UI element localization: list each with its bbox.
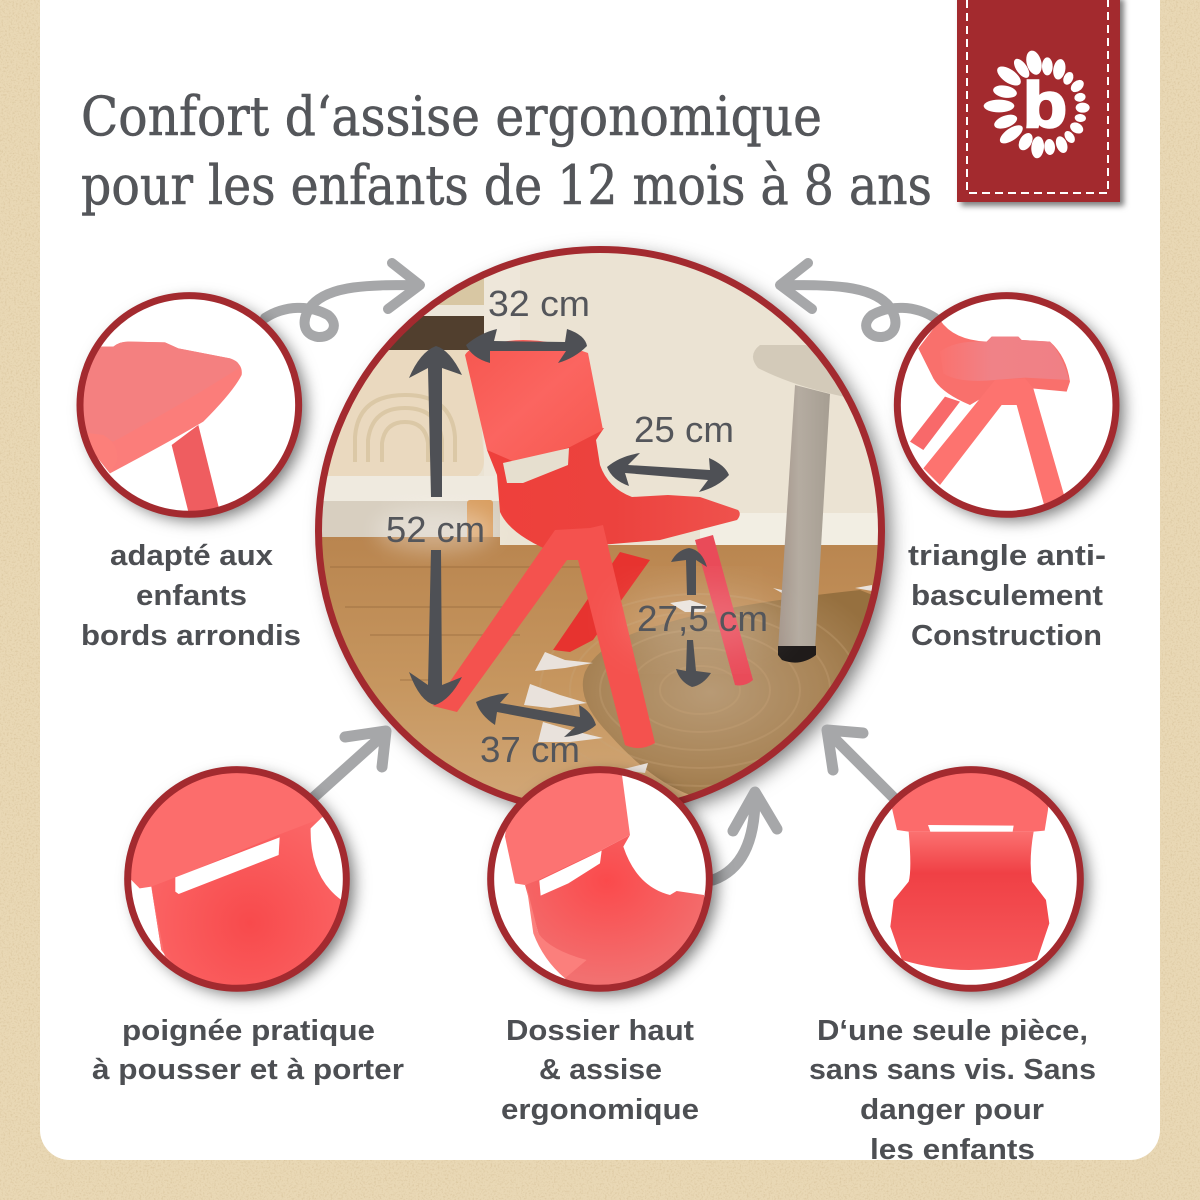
label: anti-tip triangle: basculement: [911, 580, 1103, 612]
label: rounded edges: adapté aux: [110, 540, 273, 572]
label: one piece: [809, 1015, 1096, 1166]
wood floor: [322, 537, 878, 798]
height text halo: [375, 508, 780, 650]
dimension labels: 25 cm: [634, 409, 734, 450]
arrow: 32 cm width: [466, 329, 587, 363]
arrow: bottom centre: [713, 792, 777, 880]
dimension labels: 32 cm: [488, 283, 590, 324]
arrow: bottom left: [314, 731, 386, 797]
label: one piece: danger pour: [860, 1094, 1044, 1126]
tassels: [524, 585, 872, 773]
table: [753, 345, 850, 663]
arrow: top right curl: [780, 263, 935, 337]
dimension labels: 37 cm: [480, 729, 580, 770]
label: anti-tip triangle: [908, 540, 1106, 652]
label: high back: Dossier haut: [506, 1015, 694, 1047]
detail circle: handle: [118, 760, 358, 1000]
detail circle: one piece: [861, 760, 1081, 989]
arrow: bottom right: [827, 730, 893, 797]
detail circle: rounded edges: [77, 295, 299, 525]
rug: [540, 590, 885, 795]
label: rounded edges: bords arrondis: [81, 620, 301, 652]
arrow: 27,5 cm seat height: [671, 548, 711, 687]
label: high back: ergonomique: [501, 1094, 699, 1126]
label: anti-tip triangle: Construction: [911, 620, 1102, 652]
dimension labels: [386, 283, 768, 770]
label: high back: & assise: [539, 1054, 662, 1086]
dimension labels: 27,5 cm: [637, 598, 768, 639]
title: pour les enfants de 12 mois à 8 ans: [81, 154, 932, 217]
shelf unit: [322, 278, 500, 537]
label: one piece: sans sans vis. Sans: [809, 1054, 1096, 1086]
title: [81, 85, 932, 217]
label: handle: à pousser et à porter: [92, 1054, 404, 1086]
label: one piece: les enfants: [870, 1134, 1035, 1166]
arrow: 52 cm height down: [409, 550, 462, 705]
detail circle: anti-tip triangle: [897, 295, 1117, 515]
label: high back: [501, 1015, 699, 1126]
label: rounded edges: enfants: [136, 580, 247, 612]
title: Confort d‘assise ergonomique: [81, 85, 822, 148]
dimension labels: 52 cm: [386, 509, 485, 550]
label: anti-tip triangle: triangle anti-: [908, 540, 1106, 572]
label: handle: poignée pratique: [122, 1015, 375, 1047]
label: one piece: D‘une seule pièce,: [817, 1015, 1088, 1047]
label: rounded edges: [81, 540, 301, 652]
logo tag: b: [1023, 69, 1067, 141]
label: handle: [92, 1015, 404, 1086]
logo tag: [957, 0, 1120, 202]
chair: [433, 340, 753, 748]
arrow: 25 cm depth: [607, 453, 729, 492]
arrow: 37 cm width: [476, 693, 596, 737]
detail circle: high back and seat: [490, 760, 720, 1000]
main circle: chair photo: [310, 250, 890, 830]
arrow: top left curl: [265, 263, 420, 337]
arrow: 52 cm height up: [409, 346, 462, 497]
baseboard: [700, 513, 878, 545]
